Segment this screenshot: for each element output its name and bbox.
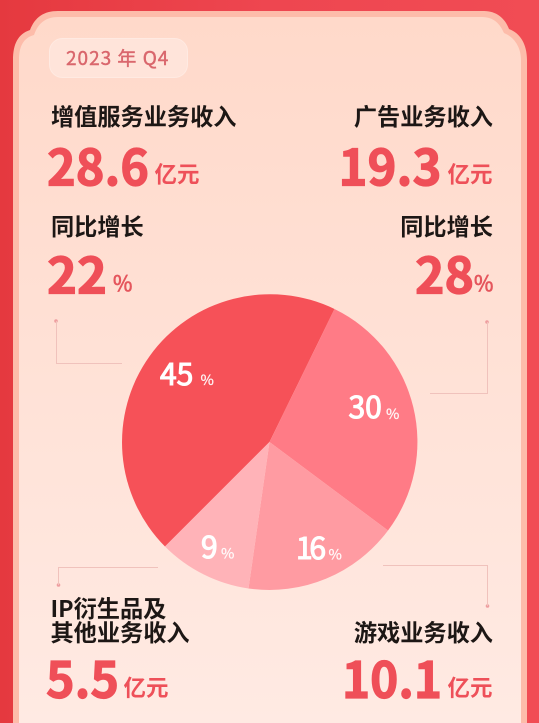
label: 30% <box>348 383 399 427</box>
label: 16%: 16 <box>296 524 326 568</box>
slice: 16% <box>248 442 388 590</box>
leader line: bottom right <box>383 566 489 608</box>
label: 45% <box>160 350 214 394</box>
block: IP derivatives and other revenue: 5.5 <box>46 641 119 713</box>
block: games revenue: 10.1 <box>342 641 442 713</box>
block: advertising revenue: 19.3 <box>338 128 442 200</box>
block: advertising year-on-year growth: 同比增长 <box>400 208 493 242</box>
label: 9%: 9 <box>201 523 218 567</box>
label: 30%: % <box>386 403 399 424</box>
block: advertising revenue: 亿元 <box>448 158 493 190</box>
block: value-added year-on-year growth <box>47 208 144 308</box>
badge: 2023 年 Q4: 2023 年 Q4 <box>66 44 169 71</box>
block: IP derivatives and other revenue: IP衍生品及 <box>50 590 166 624</box>
slice: 9% <box>165 442 270 588</box>
block: value-added year-on-year growth: % <box>113 268 132 298</box>
label: 9%: % <box>221 542 234 564</box>
label: 9% <box>201 523 234 567</box>
block: IP derivatives and other revenue <box>46 590 190 713</box>
slice: 45% <box>122 294 334 546</box>
block: value-added year-on-year growth: 22 <box>47 236 107 308</box>
block: games revenue: 游戏业务收入 <box>354 614 493 648</box>
label: 16% <box>296 524 342 568</box>
slice: 30% <box>270 309 417 530</box>
badge: 2023 年 Q4 <box>50 38 188 78</box>
label: 30%: 30 <box>348 383 382 427</box>
label: 45%: 45 <box>160 350 193 394</box>
block: IP derivatives and other revenue: 其他业务收入 <box>50 614 190 648</box>
block: games revenue: 亿元 <box>448 671 493 703</box>
block: games revenue <box>342 614 493 713</box>
leader line: bottom left <box>57 568 158 587</box>
block: advertising year-on-year growth: 28 <box>415 236 474 308</box>
pie chart <box>122 294 417 590</box>
block: value-added services revenue: 28.6 <box>47 128 149 200</box>
block: advertising revenue: 广告业务收入 <box>354 98 493 132</box>
label: 45%: % <box>200 369 214 390</box>
leader line: top right <box>430 320 489 394</box>
block: IP derivatives and other revenue: 亿元 <box>124 671 169 703</box>
label: 16%: % <box>328 544 342 564</box>
block: advertising year-on-year growth <box>400 208 493 308</box>
block: advertising revenue <box>338 98 493 200</box>
block: value-added services revenue: 增值服务业务收入 <box>51 98 236 132</box>
leader line: top left <box>54 319 122 364</box>
block: advertising year-on-year growth: % <box>474 268 493 298</box>
block: value-added year-on-year growth: 同比增长 <box>51 208 144 242</box>
block: value-added services revenue: 亿元 <box>154 158 200 190</box>
block: value-added services revenue <box>47 98 236 200</box>
